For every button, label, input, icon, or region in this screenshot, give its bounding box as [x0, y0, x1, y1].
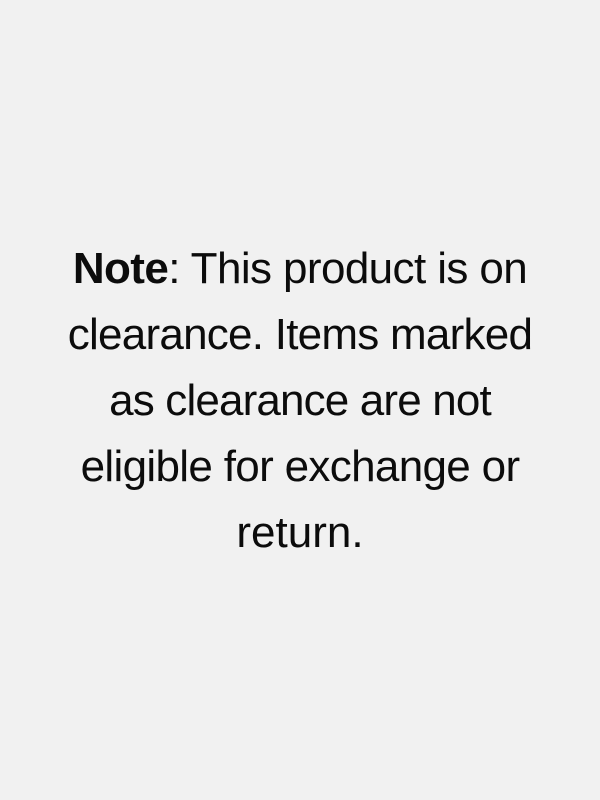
note text block: Note: This product is on: [73, 244, 527, 293]
note text block: return.: [236, 508, 364, 557]
note text block: [68, 244, 532, 557]
note text block: eligible for exchange or: [81, 442, 519, 491]
note text block: clearance. Items marked: [68, 310, 532, 359]
note text block: as clearance are not: [109, 376, 491, 425]
